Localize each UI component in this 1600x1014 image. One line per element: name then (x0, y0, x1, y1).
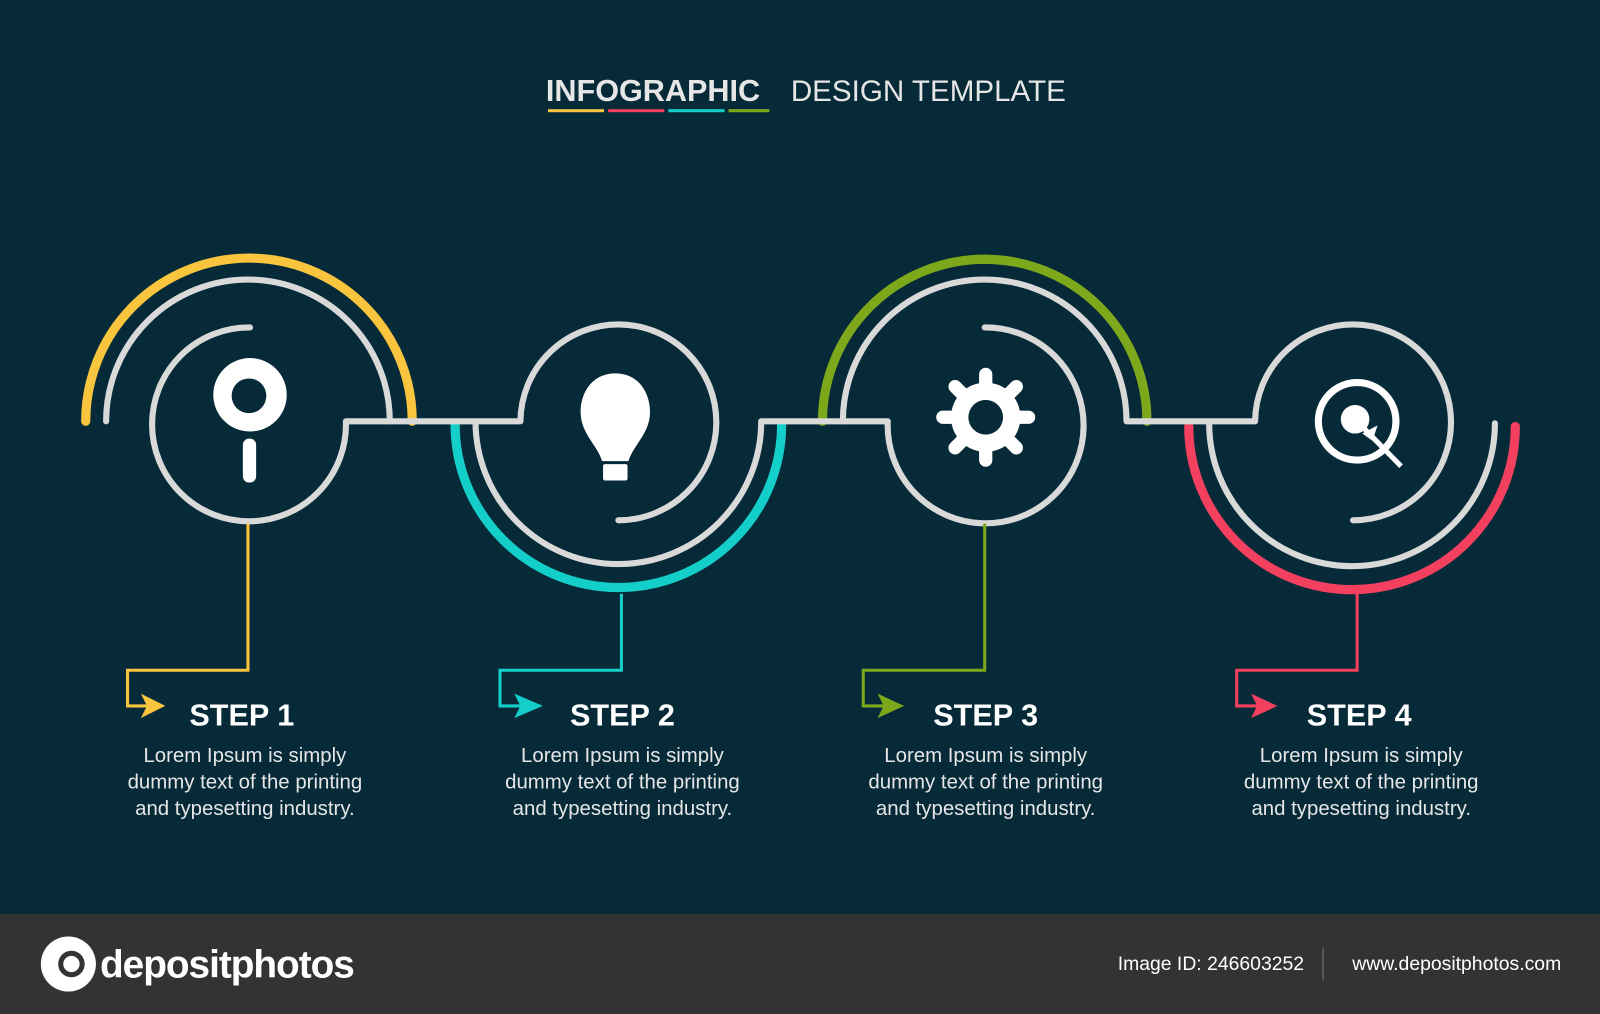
step 2 text: STEP 2 (570, 698, 675, 732)
icon: gear (943, 374, 1029, 460)
step 1 text (128, 698, 362, 820)
footer bar: Image ID: 246603252 (1118, 953, 1304, 975)
step 3 text: STEP 3 (933, 698, 1038, 732)
footer bar: www.depositphotos.com (1351, 953, 1561, 975)
step 2 text: and typesetting industry. (513, 798, 732, 820)
step 3 text: and typesetting industry. (876, 798, 1095, 820)
step 3 text: Lorem Ipsum is simply (884, 745, 1088, 767)
step 2 text (505, 698, 740, 820)
icon: target search (1318, 383, 1401, 466)
icon: magnifier (213, 358, 287, 483)
step 1 text: and typesetting industry. (135, 798, 355, 820)
step 4 text: and typesetting industry. (1251, 798, 1471, 820)
step 3 text: dummy text of the printing (868, 772, 1103, 794)
step 1 text: Lorem Ipsum is simply (143, 745, 347, 767)
footer bar (0, 914, 1600, 1014)
step 3 text (868, 698, 1103, 820)
title: DESIGN TEMPLATE (791, 75, 1066, 108)
step 2 text: Lorem Ipsum is simply (521, 745, 725, 767)
title (546, 74, 1066, 112)
arrows (141, 694, 1278, 718)
step 4 text: STEP 4 (1307, 698, 1412, 732)
timeline wave (86, 258, 1515, 590)
step 4 text: Lorem Ipsum is simply (1260, 745, 1463, 767)
step 1 text: dummy text of the printing (128, 772, 362, 794)
connectors (128, 523, 1357, 706)
icon: light bulb (581, 373, 650, 480)
footer bar: depositphotos (100, 943, 354, 986)
title: INFOGRAPHIC (546, 74, 760, 108)
step 2 text: dummy text of the printing (505, 772, 740, 794)
step 1 text: STEP 1 (189, 698, 294, 732)
step 4 text: dummy text of the printing (1244, 772, 1479, 794)
step 4 text (1244, 698, 1479, 820)
